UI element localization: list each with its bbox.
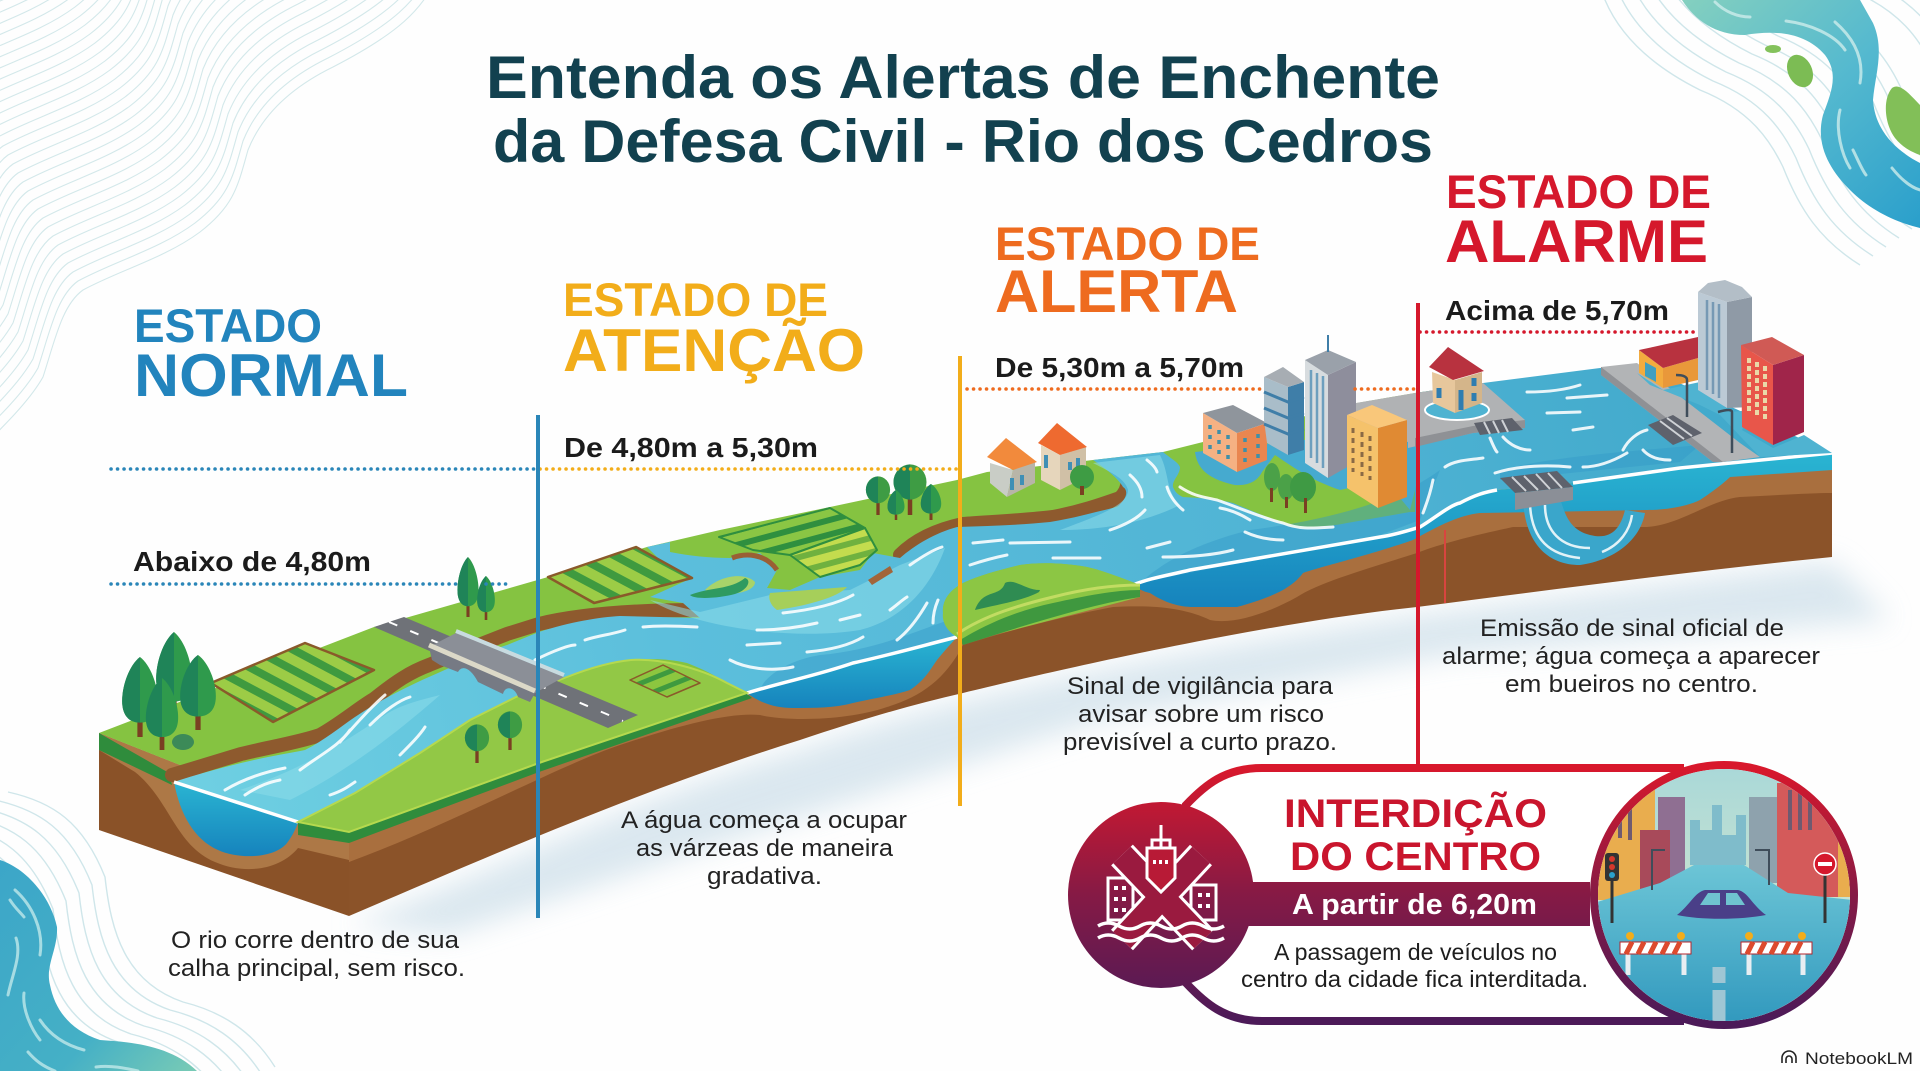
corner river: top right bbox=[1603, 0, 1920, 265]
water: front bowl left bbox=[747, 637, 957, 708]
vertical stage line: blue bbox=[536, 415, 540, 918]
description: alarme bbox=[1442, 615, 1820, 698]
building: orange with red roof bbox=[1639, 337, 1698, 388]
field: upper bbox=[719, 508, 877, 577]
panel description: centro da cidade fica interditada. bbox=[1241, 966, 1588, 992]
panel height value: A partir de 6,20m bbox=[1292, 889, 1537, 921]
bush on lower island bbox=[975, 582, 1040, 610]
heading: estado de atenção: ESTADO DE bbox=[563, 273, 828, 326]
heading: estado de alarme: ESTADO DE bbox=[1446, 165, 1711, 218]
water: left channel cross-section bbox=[174, 782, 298, 856]
heading: estado normal: ESTADO bbox=[134, 299, 322, 352]
description: atenção bbox=[621, 807, 907, 890]
city buildings: alert stage bbox=[1195, 335, 1420, 513]
broken bank bbox=[868, 566, 893, 585]
flooded patch bbox=[769, 587, 847, 610]
heading: estado de alerta bbox=[995, 217, 1260, 325]
heading: estado de alarme bbox=[1445, 165, 1711, 275]
building: tall grey bbox=[1698, 280, 1752, 408]
plaza behind yellow building bbox=[1356, 393, 1415, 445]
level: atenção: De 4,80m a 5,30m bbox=[564, 432, 818, 463]
island: lower meadow bbox=[298, 563, 1140, 832]
level: alerta: De 5,30m a 5,70m bbox=[995, 352, 1244, 383]
grass front edge bbox=[99, 693, 752, 843]
building: orange bbox=[1203, 405, 1267, 472]
panel: interdição do centro bbox=[1068, 765, 1858, 1030]
soil: front face bbox=[349, 453, 1832, 916]
heading: estado normal: NORMAL bbox=[134, 342, 408, 409]
terrain block illustration bbox=[99, 280, 1832, 916]
description: alarme: em bueiros no centro. bbox=[1505, 671, 1758, 698]
heading: estado de alerta: ESTADO DE bbox=[995, 217, 1260, 270]
dotted level lines bbox=[111, 332, 1698, 584]
title: da Defesa Civil - Rio dos Cedros bbox=[493, 108, 1433, 175]
description: alarme: Emissão de sinal oficial de bbox=[1480, 615, 1784, 642]
drain waterfall into soil bbox=[1523, 498, 1645, 565]
road dashes bbox=[1712, 967, 1726, 1022]
heading: estado de atenção bbox=[563, 273, 865, 384]
bridge bbox=[429, 631, 564, 702]
field: middle bbox=[548, 547, 692, 603]
heading: estado de alerta: ALERTA bbox=[995, 258, 1238, 325]
river banks bbox=[172, 470, 1127, 775]
road barriers bbox=[1620, 932, 1812, 975]
description: alarme: alarme; água começa a aparecer bbox=[1442, 643, 1820, 670]
trees: near bridge bbox=[457, 557, 495, 620]
heading: estado de atenção: ATENÇÃO bbox=[563, 317, 865, 384]
soil: upper light band bbox=[349, 453, 1832, 862]
field: left bbox=[211, 643, 374, 722]
red level marker in soil bbox=[1444, 530, 1446, 603]
panel capsule bbox=[1186, 768, 1680, 1021]
icon: flooded city crossed out bbox=[1068, 802, 1254, 988]
heading: estado normal bbox=[134, 299, 408, 409]
flood around city buildings bbox=[1195, 440, 1420, 510]
title: Entenda os Alertas de Enchente bbox=[486, 44, 1440, 111]
building: blue striped bbox=[1264, 367, 1304, 455]
field: small bbox=[630, 665, 700, 697]
water: front bowl right bbox=[1133, 453, 1832, 607]
river deeper current bbox=[760, 445, 1700, 690]
description: alerta: Sinal de vigilância para bbox=[1067, 673, 1334, 700]
river lighter current bbox=[240, 455, 1180, 800]
trees in front of buildings bbox=[1264, 463, 1316, 513]
description: atenção: as várzeas de maneira bbox=[636, 835, 894, 862]
description: normal: O rio corre dentro de sua bbox=[171, 927, 460, 954]
grass surface bbox=[99, 383, 1832, 832]
terrain shadow bbox=[349, 562, 1890, 935]
description: atenção: A água começa a ocupar bbox=[621, 807, 907, 834]
no entry sign bbox=[1814, 853, 1836, 923]
flooded house bbox=[1425, 347, 1489, 420]
NotebookLM mark: NotebookLM bbox=[1805, 1049, 1913, 1068]
level: normal: Abaixo de 4,80m bbox=[133, 546, 371, 577]
description: atenção: gradativa. bbox=[707, 863, 822, 890]
small islet bbox=[690, 576, 755, 598]
vertical stage line: red bbox=[1416, 303, 1420, 770]
trees: lower meadow bbox=[465, 711, 522, 763]
car bbox=[1677, 890, 1766, 919]
panel description bbox=[1241, 939, 1588, 992]
flood around right buildings bbox=[1637, 373, 1832, 457]
panel heading bbox=[1284, 790, 1547, 879]
building: tall grey tower bbox=[1305, 335, 1356, 478]
heading: estado de alarme: ALARME bbox=[1445, 208, 1708, 275]
title bbox=[486, 44, 1440, 175]
description: normal bbox=[168, 927, 465, 982]
soil: left face band and channel bbox=[99, 733, 349, 869]
soil: left face bbox=[99, 733, 349, 916]
vertical stage line: yellow bbox=[958, 356, 962, 806]
panel description: A passagem de veículos no bbox=[1274, 939, 1557, 965]
city buildings: alarm stage bbox=[1639, 280, 1804, 453]
road bbox=[374, 617, 638, 728]
river white waterline bbox=[174, 453, 1832, 822]
river surface bbox=[174, 365, 1832, 822]
houses: riverside village bbox=[987, 423, 1094, 497]
building: red bbox=[1741, 337, 1804, 445]
road markings bbox=[389, 622, 623, 721]
description: alerta: previsível a curto prazo. bbox=[1063, 729, 1337, 756]
traffic light bbox=[1605, 853, 1619, 923]
plaza and streets: alarm stage bbox=[1408, 363, 1832, 462]
panel heading: INTERDIÇÃO bbox=[1284, 790, 1547, 836]
street lamps bbox=[1676, 375, 1732, 453]
trees: left cluster bbox=[122, 632, 216, 750]
panel heading: DO CENTRO bbox=[1290, 835, 1541, 879]
level: alarme: Acima de 5,70m bbox=[1445, 295, 1669, 326]
description: normal: calha principal, sem risco. bbox=[168, 955, 465, 982]
flood bank arc bbox=[732, 555, 777, 570]
river white current streaks bbox=[225, 385, 1670, 795]
corner river: bottom left bbox=[0, 792, 275, 1071]
building: yellow bbox=[1347, 405, 1407, 508]
description: alerta: avisar sobre um risco bbox=[1078, 701, 1324, 728]
scene: flooded street bbox=[1594, 765, 1858, 1030]
trees: upper meadow bbox=[866, 464, 941, 520]
top-left decorative contour lines bbox=[0, 0, 440, 470]
description: alerta bbox=[1063, 673, 1337, 756]
storm drains bbox=[1474, 415, 1702, 510]
band: height bbox=[1240, 882, 1590, 926]
